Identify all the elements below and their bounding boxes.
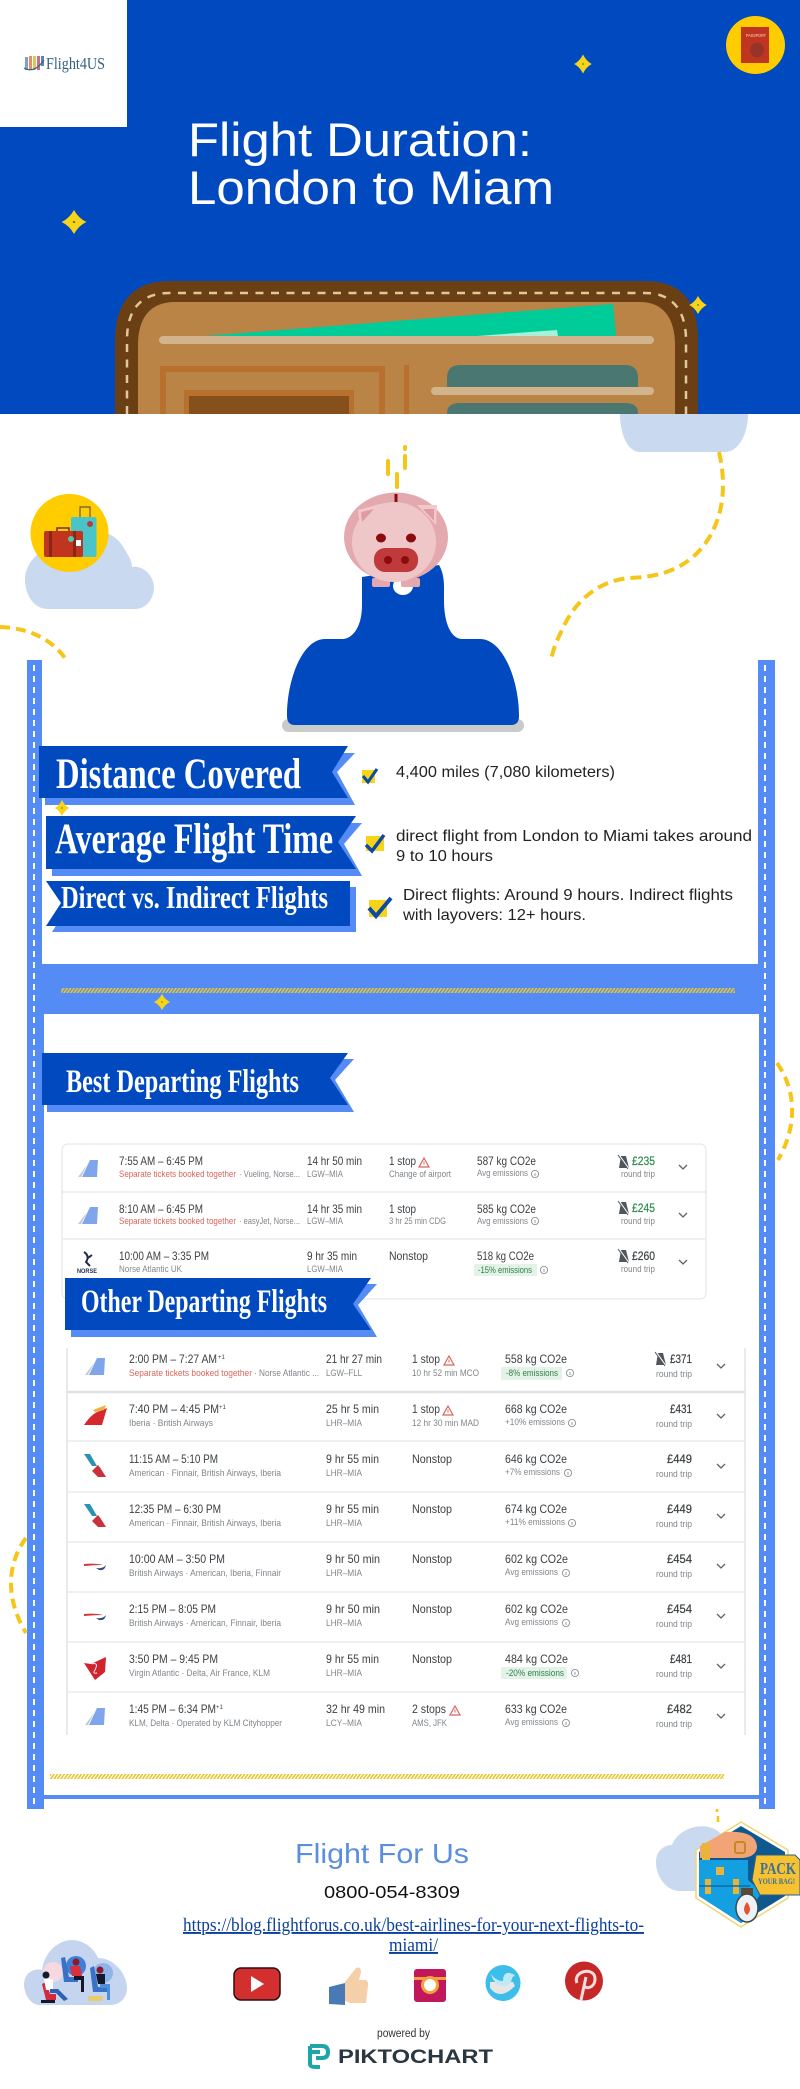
flight row 2: · easyJet, Norse... (239, 1216, 300, 1227)
flight row 7: Nonstop (412, 1652, 452, 1666)
text: distance: 4,400 miles (7,080 kilometers) (396, 764, 615, 781)
flight row 8: 1:45 PM – 6:34 PM (129, 1702, 216, 1716)
blue frame (27, 660, 775, 1809)
flight row 8: 32 hr 49 min (326, 1702, 385, 1716)
flight row 1: · Norse Atlantic ... (254, 1368, 319, 1379)
table: other departing flights (67, 1347, 745, 1735)
flight row 8: KLM, Delta · Operated by KLM Cityhopper (129, 1718, 282, 1729)
flight row 3: 9 hr 55 min (326, 1452, 379, 1466)
flight row 4: 12:35 PM – 6:30 PM (129, 1502, 221, 1516)
flight row 2: £245 (632, 1201, 655, 1215)
flight row 3: round trip (621, 1264, 655, 1275)
flight row 6: Nonstop (412, 1602, 452, 1616)
logo box: Flight4US (46, 54, 105, 73)
flight row 1: Separate tickets booked together (119, 1169, 236, 1180)
flight row 3: £449 (667, 1452, 692, 1466)
flight row 3: 518 kg CO2e (477, 1249, 534, 1263)
flight row 4 (84, 1502, 725, 1530)
flight row 6 (84, 1602, 725, 1630)
flight row 7: 484 kg CO2e (505, 1652, 568, 1666)
flight row 2: LHR–MIA (326, 1418, 363, 1429)
flight row 7 (84, 1652, 725, 1680)
flight row 2: LGW–MIA (307, 1216, 344, 1227)
flight row 3: round trip (656, 1469, 692, 1480)
flight row 1: 587 kg CO2e (477, 1154, 536, 1168)
cloud with luggage (25, 494, 154, 609)
flight row 2 (84, 1402, 725, 1430)
flight row 1: 1 stop (389, 1154, 416, 1168)
hero panel (0, 0, 800, 414)
flight row 1: LGW–FLL (326, 1368, 362, 1379)
flag (752, 1855, 800, 1895)
flight row 2 (78, 1201, 687, 1227)
flight row 6: £454 (667, 1602, 692, 1616)
flight row 7: -20% emissions (506, 1668, 564, 1679)
flight row 1 (78, 1154, 687, 1180)
footer link (183, 1915, 644, 1956)
flight row 6: 602 kg CO2e (505, 1602, 568, 1616)
flight row 8: LCY–MIA (326, 1718, 363, 1729)
piktochart logo (310, 2046, 493, 2068)
coin dashes (388, 447, 405, 487)
ribbon: distance covered: Distance Covered (56, 751, 301, 798)
ribbon: other departing flights (65, 1278, 377, 1337)
icon: thumbs up (329, 1968, 368, 2005)
piktochart logo: PIKTOCHART (338, 2047, 493, 2068)
footer link: https://blog.flightforus.co.uk/best-airlines-for-your-next-flights-to- (183, 1915, 644, 1936)
flight row 1: +1 (218, 1355, 226, 1361)
flight row 5 (84, 1552, 725, 1580)
icon: pinterest (565, 1962, 603, 2000)
cloud with travellers (24, 1940, 127, 2005)
flight row 1: Change of airport (389, 1169, 451, 1180)
star (574, 54, 592, 74)
flight row 7: 3:50 PM – 9:45 PM (129, 1652, 218, 1666)
flight row 3: 11:15 AM – 5:10 PM (129, 1452, 218, 1466)
flight row 1: 558 kg CO2e (505, 1352, 567, 1366)
flight row 8: round trip (656, 1719, 692, 1730)
icon: pig (344, 492, 448, 587)
star (154, 994, 170, 1010)
icon: youtube (234, 1968, 280, 2000)
flight row 1: 7:55 AM – 6:45 PM (119, 1154, 203, 1168)
flight row 8: 2 stops (412, 1702, 446, 1716)
flight row 6: Avg emissions (505, 1617, 558, 1628)
footer phone: 0800-054-8309 (324, 1882, 460, 1902)
flight row 8: +1 (216, 1705, 224, 1711)
flight row 7: £481 (670, 1652, 692, 1666)
flight row 5: £454 (667, 1552, 692, 1566)
ribbon: direct vs indirect (46, 879, 356, 932)
piggy bank bust (282, 492, 524, 732)
flight row 1: 1 stop (412, 1352, 440, 1366)
flight row 3: American · Finnair, British Airways, Iberia (129, 1468, 282, 1479)
flight row 1: Separate tickets booked together (129, 1368, 252, 1379)
flight row 6: 9 hr 50 min (326, 1602, 380, 1616)
flight row 6: British Airways · American, Finnair, Iberia (129, 1618, 282, 1629)
ribbon: other departing flights: Other Departing Flights (81, 1284, 327, 1320)
flight row 7: LHR–MIA (326, 1668, 363, 1679)
footer brand name: Flight For Us (295, 1838, 469, 1869)
flight row 8 (85, 1702, 725, 1730)
star (55, 800, 69, 816)
icon: passport (726, 16, 785, 74)
flight row 2: 1 stop (389, 1202, 416, 1216)
icon: luggage (30, 494, 108, 572)
flight row 7: round trip (656, 1669, 692, 1680)
flight row 1: 21 hr 27 min (326, 1352, 382, 1366)
flight row 6: 2:15 PM – 8:05 PM (129, 1602, 216, 1616)
flight row 6: round trip (656, 1619, 692, 1630)
text: average time: direct flight from London to Miami takes around (396, 828, 752, 845)
title: Flight Duration: (188, 114, 532, 167)
text: direct vs indirect (402, 887, 733, 924)
flight row 3: £260 (632, 1249, 655, 1263)
flight row 4: 674 kg CO2e (505, 1502, 567, 1516)
flight row 4: 9 hr 55 min (326, 1502, 379, 1516)
flight row 2: 585 kg CO2e (477, 1202, 536, 1216)
flight row 8: AMS, JFK (412, 1718, 448, 1729)
flight row 1: £371 (670, 1352, 692, 1366)
flight row 5: Nonstop (412, 1552, 452, 1566)
flight row 8: Avg emissions (505, 1717, 558, 1728)
flight row 4: American · Finnair, British Airways, Iberia (129, 1518, 282, 1529)
flight row 5: British Airways · American, Iberia, Finnair (129, 1568, 281, 1579)
ribbon: best departing flights: Best Departing Flights (66, 1064, 299, 1100)
flight row 5: round trip (656, 1569, 692, 1580)
check 2 (366, 835, 384, 851)
powered by: powered by (377, 2028, 430, 2040)
flight row 2: Separate tickets booked together (119, 1216, 236, 1227)
flight row 7: Virgin Atlantic · Delta, Air France, KLM (129, 1668, 270, 1679)
check 1 (362, 769, 377, 783)
flight row 1: 2:00 PM – 7:27 AM (129, 1352, 217, 1366)
flight row 4: +11% emissions (505, 1517, 565, 1528)
flight row 1: · Vueling, Norse... (239, 1169, 300, 1180)
flight row 1: LGW–MIA (307, 1169, 344, 1180)
star (62, 210, 86, 234)
flight row 3: Norse Atlantic UK (119, 1264, 183, 1275)
ribbon: average flight time: Average Flight Time (55, 816, 333, 863)
dashed arc right (777, 1063, 792, 1160)
text: average time: 9 to 10 hours (396, 848, 493, 865)
flight row 1: -8% emissions (506, 1368, 558, 1379)
flight row 3: +7% emissions (505, 1467, 560, 1478)
flight row 5: 9 hr 50 min (326, 1552, 380, 1566)
flight row 2: Iberia · British Airways (129, 1418, 213, 1429)
flight row 7: 9 hr 55 min (326, 1652, 379, 1666)
cloud top right (620, 414, 748, 452)
flight row 2: +1 (219, 1405, 227, 1411)
flight row 5: 10:00 AM – 3:50 PM (129, 1552, 225, 1566)
flight row 3: LHR–MIA (326, 1468, 363, 1479)
flight row 2: 25 hr 5 min (326, 1402, 379, 1416)
flight row 2: +10% emissions (505, 1417, 565, 1428)
flight row 3 (77, 1249, 687, 1276)
flight row 3: 9 hr 35 min (307, 1249, 357, 1263)
flight row 2: £431 (670, 1402, 692, 1416)
flight row 3: NORSE (77, 1269, 97, 1275)
flight row 8: £482 (667, 1702, 692, 1716)
flight row 3: LGW–MIA (307, 1264, 344, 1275)
dashed flight path left (0, 627, 65, 658)
ribbon: direct vs indirect: Direct vs. Indirect Flights (61, 879, 328, 915)
flight row 1: 10 hr 52 min MCO (412, 1368, 479, 1379)
wallet illustration (115, 281, 698, 414)
star (689, 296, 707, 314)
flight row 4: £449 (667, 1502, 692, 1516)
flight row 2: round trip (621, 1216, 655, 1227)
ribbon: average flight time (46, 816, 362, 876)
flight row 3: Nonstop (412, 1452, 452, 1466)
dash above badge (717, 1809, 718, 1822)
logo box (0, 0, 127, 127)
title: London to Miam (188, 162, 554, 215)
icon: passport: PASSPORT (746, 33, 766, 38)
flight row 2: round trip (656, 1419, 692, 1430)
flight row 2: 14 hr 35 min (307, 1202, 362, 1216)
flight row 5: Avg emissions (505, 1567, 558, 1578)
flight row 1: round trip (656, 1369, 692, 1380)
flight row 5: LHR–MIA (326, 1568, 363, 1579)
table: best departing flights (62, 1144, 706, 1299)
flight row 1 (85, 1352, 725, 1380)
icon: instagram (414, 1969, 446, 2002)
flight row 4: round trip (656, 1519, 692, 1530)
flight row 2: 1 stop (412, 1402, 440, 1416)
flight row 3: -15% emissions (478, 1265, 532, 1276)
flight row 6: LHR–MIA (326, 1618, 363, 1629)
flight row 3: 646 kg CO2e (505, 1452, 567, 1466)
dashed arc left (11, 1538, 26, 1633)
flight row 2: 668 kg CO2e (505, 1402, 567, 1416)
flight row 2: 3 hr 25 min CDG (389, 1216, 446, 1227)
icon: twitter (486, 1965, 520, 2001)
flight row 2: 12 hr 30 min MAD (412, 1418, 479, 1429)
flight row 1: £235 (632, 1154, 655, 1168)
flight row 2: Avg emissions (477, 1216, 528, 1227)
flight row 3 (84, 1452, 725, 1480)
flight row 3: 10:00 AM – 3:35 PM (119, 1249, 209, 1263)
flight row 1: round trip (621, 1169, 655, 1180)
text: direct vs indirect: Direct flights: Around 9 hours. Indirect flights (403, 887, 733, 904)
flight row 3: Nonstop (389, 1249, 428, 1263)
cloud behind badge (656, 1826, 735, 1891)
flight row 4: LHR–MIA (326, 1518, 363, 1529)
flight row 2: 7:40 PM – 4:45 PM (129, 1402, 219, 1416)
text: direct vs indirect: with layovers: 12+ hours. (402, 907, 586, 924)
check 3 (369, 898, 391, 917)
flight row 5: 602 kg CO2e (505, 1552, 568, 1566)
flight row 8: 633 kg CO2e (505, 1702, 567, 1716)
flight row 1: 14 hr 50 min (307, 1154, 362, 1168)
flight row 4: Nonstop (412, 1502, 452, 1516)
ribbon: best departing flights (42, 1053, 354, 1112)
text: average time (396, 828, 752, 865)
footer link: miami/ (389, 1935, 439, 1956)
title (188, 114, 554, 215)
flight row 1: Avg emissions (477, 1168, 528, 1179)
flight row 2: 8:10 AM – 6:45 PM (119, 1202, 203, 1216)
dashed flight path right (551, 452, 723, 660)
badge: pack your bag (696, 1822, 800, 1927)
